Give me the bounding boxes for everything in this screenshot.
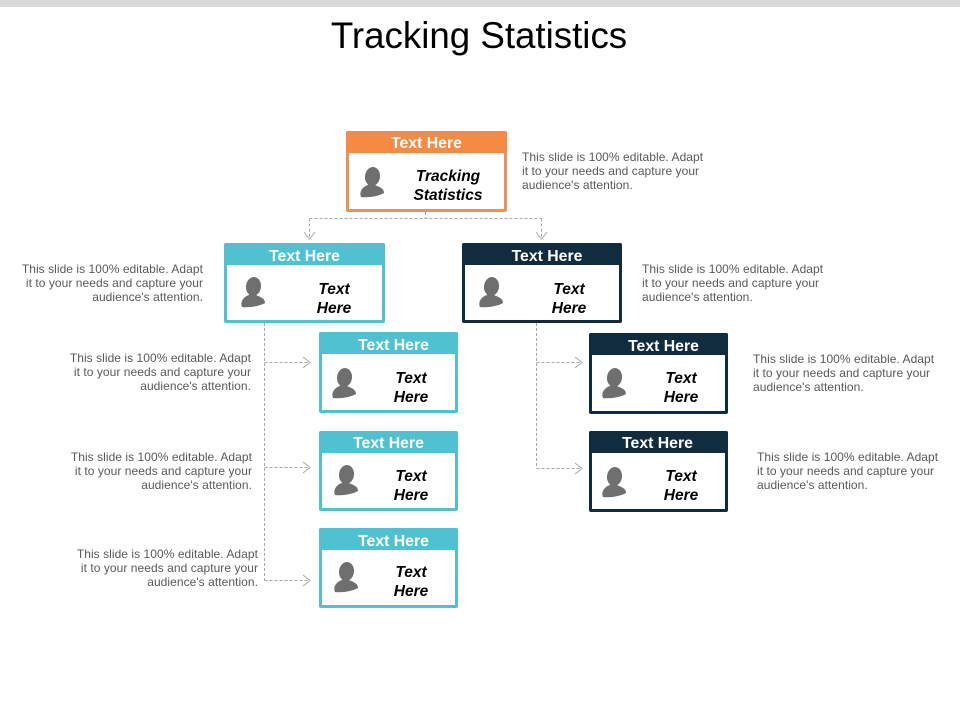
- description: right branch: This slide is 100% editable. Adapt: [642, 262, 823, 276]
- icon: person: [602, 467, 626, 498]
- description: teal child 2: audience's attention.: [141, 478, 252, 492]
- icon: person: [241, 277, 265, 308]
- icon: person: [479, 277, 503, 308]
- card: navy child 1: [589, 333, 728, 414]
- description: teal child 2: This slide is 100% editable. Adapt: [71, 450, 252, 464]
- description: left branch: This slide is 100% editable. Adapt: [22, 262, 203, 276]
- description: left branch: [22, 262, 203, 304]
- icon: person: [334, 465, 358, 496]
- description: navy child 1: This slide is 100% editable. Adapt: [753, 352, 934, 366]
- card header: [589, 431, 728, 453]
- card name: Text: [665, 370, 697, 387]
- card header: Text Here: [358, 337, 429, 354]
- card: teal child 2: [319, 431, 458, 511]
- card name: [394, 468, 428, 504]
- description: teal child 3: This slide is 100% editable. Adapt: [77, 547, 258, 561]
- card header: [319, 528, 458, 550]
- title: Tracking Statistics: [331, 15, 627, 56]
- card header: Text Here: [512, 248, 582, 265]
- description: root: it to your needs and capture your: [522, 164, 699, 178]
- description: teal child 1: audience's attention.: [140, 379, 251, 393]
- card name: [394, 564, 428, 600]
- card name: Here: [664, 389, 698, 406]
- card name: Here: [317, 300, 351, 317]
- card name: Text: [395, 564, 427, 581]
- description: teal child 3: it to your needs and capture your: [81, 561, 258, 575]
- description: navy child 2: This slide is 100% editable. Adapt: [757, 450, 938, 464]
- card name: Text: [665, 468, 697, 485]
- description: teal child 2: [71, 450, 252, 492]
- card name: Text: [395, 370, 427, 387]
- card: root: [346, 131, 507, 212]
- card: left branch: [224, 243, 385, 323]
- card: teal child 3: [319, 528, 458, 608]
- card name: Text: [318, 281, 350, 298]
- card header: Text Here: [353, 435, 424, 452]
- top grey band: [0, 0, 960, 7]
- card header: Text Here: [269, 248, 340, 265]
- card name: Here: [394, 583, 428, 600]
- description: navy child 1: it to your needs and capture your: [753, 366, 930, 380]
- icon: person: [602, 368, 626, 398]
- arrowheads: teal branch: [303, 357, 310, 586]
- card name: Text: [553, 281, 585, 298]
- card header: [462, 243, 622, 265]
- card header: [319, 431, 458, 453]
- connector: navy branch: [536, 323, 581, 468]
- description: teal child 1: This slide is 100% editable. Adapt: [70, 351, 251, 365]
- connector: root to second level: [310, 212, 542, 238]
- card name: Statistics: [414, 187, 482, 204]
- card header: Text Here: [628, 338, 699, 355]
- card header: Text Here: [358, 533, 429, 550]
- icon: person: [360, 167, 384, 198]
- card name: [552, 281, 586, 317]
- description: teal child 2: it to your needs and capture your: [75, 464, 252, 478]
- description: right branch: audience's attention.: [642, 290, 753, 304]
- connector: teal branch: [264, 323, 309, 580]
- description: teal child 1: [70, 351, 251, 393]
- icon: person: [334, 562, 358, 592]
- arrowheads: navy branch: [575, 357, 582, 474]
- card name: Text: [395, 468, 427, 485]
- card name: [664, 370, 698, 406]
- card name: Here: [552, 300, 586, 317]
- card: navy child 2: [589, 431, 728, 512]
- card header: [319, 332, 458, 354]
- description: teal child 1: it to your needs and capture your: [74, 365, 251, 379]
- card header: [224, 243, 385, 265]
- description: navy child 2: it to your needs and capture your: [757, 464, 934, 478]
- card name: [414, 168, 482, 204]
- card name: [317, 281, 351, 317]
- card header: Text Here: [622, 435, 693, 452]
- card: right branch: [462, 243, 622, 323]
- card header: Text Here: [391, 135, 462, 152]
- description: root: This slide is 100% editable. Adapt: [522, 150, 703, 164]
- icon: person: [332, 368, 356, 398]
- card header: [346, 131, 507, 153]
- card name: Here: [394, 389, 428, 406]
- card name: [664, 468, 698, 504]
- description: root: [522, 150, 703, 192]
- card name: Here: [394, 487, 428, 504]
- card header: [589, 333, 728, 355]
- description: navy child 2: audience's attention.: [757, 478, 868, 492]
- description: right branch: it to your needs and capture your: [642, 276, 819, 290]
- arrowheads: second level: [304, 232, 547, 239]
- description: teal child 3: audience's attention.: [147, 575, 258, 589]
- description: navy child 1: audience's attention.: [753, 380, 864, 394]
- description: right branch: [642, 262, 823, 304]
- description: navy child 1: [753, 352, 934, 394]
- description: root: audience's attention.: [522, 178, 633, 192]
- description: left branch: it to your needs and capture your: [26, 276, 203, 290]
- description: navy child 2: [757, 450, 938, 492]
- card: teal child 1: [319, 332, 458, 413]
- card name: Here: [664, 487, 698, 504]
- description: teal child 3: [77, 547, 258, 589]
- card name: [394, 370, 428, 406]
- card name: Tracking: [416, 168, 480, 185]
- description: left branch: audience's attention.: [92, 290, 203, 304]
